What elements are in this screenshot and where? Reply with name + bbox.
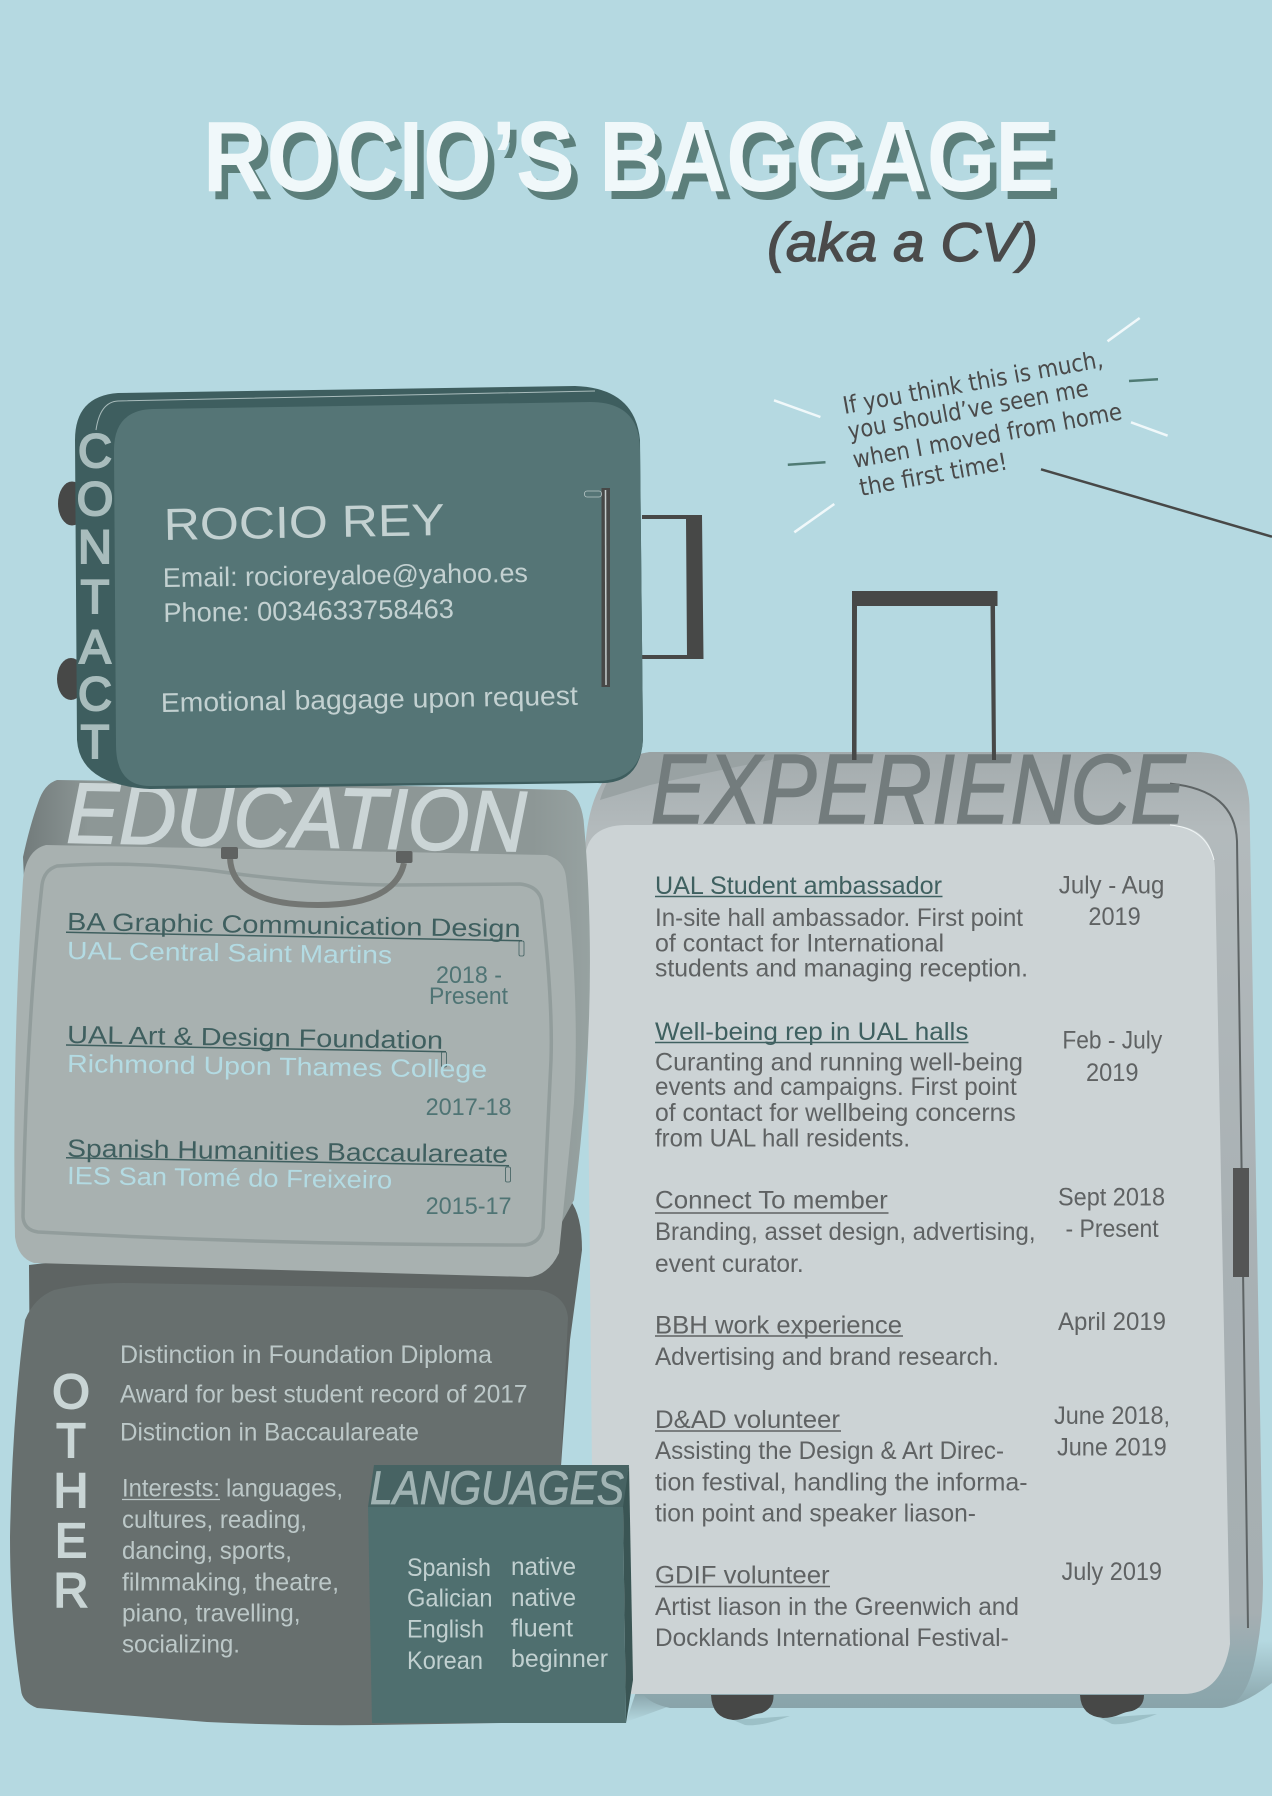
job: D&AD volunteer (655, 1402, 1170, 1527)
inner outline (23, 864, 551, 1245)
heading: education: EDUCATION (66, 766, 528, 870)
suitcase handle (642, 515, 704, 659)
interests: Interests: (122, 1475, 220, 1503)
wheels (57, 482, 86, 700)
heading: contact: T (81, 570, 109, 623)
job: connect to member (655, 1184, 1165, 1278)
box header (368, 1465, 629, 1507)
job: D&AD volunteer: D&AD volunteer (655, 1406, 840, 1434)
interests: piano, travelling, (122, 1600, 301, 1628)
job: D&AD volunteer: tion point and speaker liason- (655, 1499, 976, 1527)
distinctions (120, 1341, 527, 1447)
job: well-being rep: Feb - July (1062, 1027, 1163, 1055)
language list: native (511, 1584, 576, 1612)
job: UAL student ambassador: July - Aug (1059, 872, 1164, 900)
wheel shadow right (1100, 1714, 1157, 1724)
zipper (584, 488, 610, 687)
job: UAL student ambassador: UAL Student ambassador (655, 872, 942, 900)
job: well-being rep: of contact for wellbeing concerns (655, 1099, 1016, 1127)
job: well-being rep: Well-being rep in UAL halls (655, 1018, 968, 1046)
entry: art and design foundation: UAL Art & Design Foundation (67, 1021, 443, 1055)
job: D&AD volunteer: June 2018, (1054, 1402, 1170, 1430)
heading: other: E (55, 1515, 87, 1568)
job: well-being rep: Curanting and running well-being (655, 1048, 1023, 1076)
heading: contact (77, 424, 113, 768)
language list: Spanish (407, 1554, 491, 1582)
job: GDIF volunteer: GDIF volunteer (655, 1562, 830, 1590)
suitcase back (29, 1200, 582, 1480)
contact details (161, 558, 579, 718)
job: D&AD volunteer: June 2019 (1057, 1434, 1167, 1462)
subtitle: (aka a CV) (767, 211, 1038, 273)
job: UAL student ambassador: In-site hall ambassador. First point (655, 904, 1023, 932)
interests: socializing. (122, 1631, 240, 1659)
heading: languages: LANGUAGES (370, 1461, 624, 1514)
suitcase top shade (600, 752, 810, 800)
distinctions: Award for best student record of 2017 (120, 1381, 527, 1409)
job: D&AD volunteer: Assisting the Design & Art Direc- (655, 1437, 1004, 1465)
job: GDIF volunteer: Docklands International Festival- (655, 1624, 1009, 1652)
entry: art and design foundation (66, 1021, 512, 1121)
callout text: If you think this is much, (841, 345, 1105, 420)
suitcase front (114, 402, 643, 786)
left floor shadow (626, 1680, 700, 1722)
language list: Galician (407, 1585, 492, 1613)
heading: contact: N (78, 520, 112, 573)
job: UAL student ambassador: 2019 (1088, 903, 1141, 931)
seam line (1170, 784, 1248, 1628)
callout text (841, 345, 1124, 502)
panel: languages box (368, 1461, 633, 1723)
callout text: you should’ve seen me (846, 374, 1091, 445)
zip block (1233, 1168, 1249, 1277)
entry: BA graphic communication design (66, 908, 524, 1010)
panel: contact suitcase (57, 386, 704, 789)
entry: art and design foundation: Richmond Upon Thames College (67, 1050, 487, 1084)
distinctions: Distinction in Baccaulareate (120, 1419, 419, 1447)
heading: contact: T (81, 715, 109, 768)
heading: other: T (56, 1415, 86, 1468)
job: UAL student ambassador: of contact for International (655, 930, 944, 958)
suitcase handle (852, 591, 998, 760)
panel: experience suitcase (585, 591, 1272, 1725)
heading: contact: O (77, 472, 113, 525)
title: ROCIO’S BAGGAGE (210, 109, 1060, 221)
heading: contact: C (78, 667, 112, 720)
callout text: when I moved from home (851, 398, 1124, 474)
job: GDIF volunteer: Artist liason in the Greenwich and (655, 1593, 1019, 1621)
entry: BA graphic communication design: UAL Central Saint Martins (67, 937, 392, 970)
job: GDIF volunteer: July 2019 (1062, 1558, 1162, 1586)
suitcase back (75, 386, 643, 789)
job: D&AD volunteer: tion festival, handling the informa- (655, 1469, 1028, 1497)
language list: Korean (407, 1647, 483, 1675)
entry: spanish baccalaureate: Spanish Humanities Baccaulareate (67, 1135, 508, 1169)
interests (122, 1475, 343, 1659)
distinctions: Distinction in Foundation Diploma (120, 1341, 492, 1369)
job: connect to member: Connect To member (655, 1187, 888, 1215)
name: ROCIO REY (163, 494, 445, 550)
job: well-being rep: from UAL hall residents. (655, 1125, 910, 1153)
highlight (1170, 825, 1214, 860)
job: UAL student ambassador: students and managing reception. (655, 955, 1028, 983)
job: BBH work experience: April 2019 (1058, 1308, 1166, 1336)
job: BBH work experience: Advertising and brand research. (655, 1343, 999, 1371)
bag handle (221, 847, 412, 905)
entry: art and design foundation: 2017-18 (426, 1094, 512, 1121)
right floor shadow (1215, 1640, 1272, 1708)
interests: cultures, reading, (122, 1506, 307, 1534)
panel: education suitcase (14, 766, 590, 1277)
wheel left (711, 1695, 774, 1720)
interests: dancing, sports, (122, 1537, 292, 1565)
wheel shadow left (733, 1716, 790, 1725)
entry: BA graphic communication design: BA Graphic Communication Design (67, 908, 521, 943)
title: ROCIO’S BAGGAGE (203, 101, 1054, 213)
seam (96, 391, 595, 430)
language list: native (511, 1553, 576, 1581)
suitcase front (586, 825, 1230, 1694)
suitcase back (23, 780, 590, 1262)
wheel right (1080, 1695, 1144, 1718)
heading: other: R (54, 1565, 88, 1618)
language list: fluent (511, 1615, 573, 1643)
job: well-being rep: events and campaigns. First point (655, 1073, 1017, 1101)
interests: filmmaking, theatre, (122, 1569, 339, 1597)
job: connect to member: Branding, asset design, advertising, (655, 1218, 1036, 1246)
job: connect to member: Sept 2018 (1058, 1184, 1165, 1212)
heading: other: O (52, 1366, 90, 1419)
entry: spanish baccalaureate: 2015-17 (426, 1193, 512, 1220)
entry: spanish baccalaureate: IES San Tomé do Freixeiro (67, 1162, 392, 1195)
entry: BA graphic communication design: Present (429, 983, 508, 1010)
suitcase front (14, 845, 576, 1277)
heading: contact: A (79, 620, 111, 673)
box side (623, 1465, 633, 1723)
suitcase body (585, 752, 1263, 1708)
callout text: the first time! (857, 448, 1010, 502)
heading: other (52, 1366, 90, 1618)
contact details: Email: rocioreyaloe@yahoo.es (163, 558, 528, 593)
job: BBH work experience: BBH work experience (655, 1312, 902, 1340)
job: well-being rep (655, 1018, 1163, 1153)
language list: beginner (511, 1645, 608, 1673)
heading: other: H (54, 1465, 88, 1518)
heading: contact: C (78, 424, 112, 477)
job: GDIF volunteer (655, 1558, 1162, 1652)
interests: languages, (226, 1475, 343, 1503)
heading: experience: EXPERIENCE (651, 734, 1187, 844)
callout: speech note (774, 318, 1272, 537)
panel: other suitcase (10, 1200, 582, 1725)
contact details: Phone: 0034633758463 (163, 594, 454, 628)
language list: English (407, 1616, 484, 1644)
suitcase front (10, 1283, 568, 1725)
job: connect to member: - Present (1066, 1215, 1159, 1243)
job: UAL student ambassador (655, 872, 1164, 983)
job: connect to member: event curator. (655, 1250, 804, 1278)
arrow: pointer line (1041, 469, 1272, 537)
entry: BA graphic communication design: 2018 - (436, 962, 502, 989)
contact details: Emotional baggage upon request (161, 681, 579, 718)
language list (407, 1553, 608, 1675)
entry: spanish baccalaureate (66, 1135, 512, 1220)
job: well-being rep: 2019 (1086, 1059, 1138, 1087)
job: BBH work experience (655, 1308, 1166, 1371)
box front (368, 1507, 626, 1723)
